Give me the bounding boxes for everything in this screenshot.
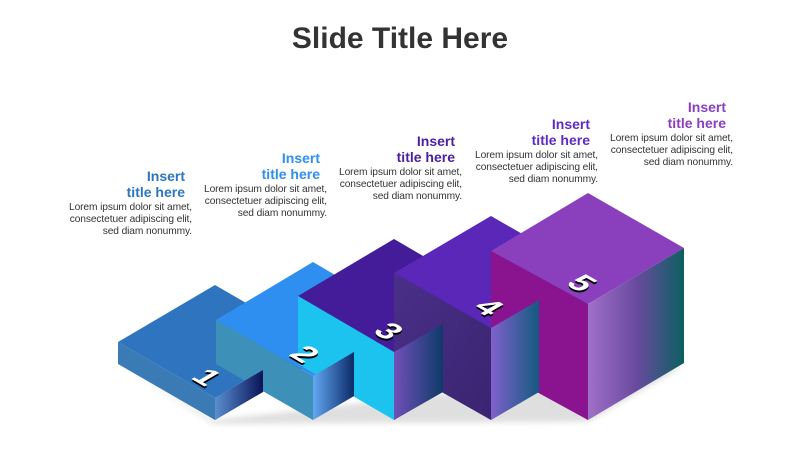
text block 2: [204, 150, 327, 219]
text: Lorem ipsum dolor sit amet,: [69, 202, 192, 213]
text: sed diam nonummy.: [103, 226, 192, 237]
text block 5: [610, 99, 733, 168]
text: Insert: [552, 116, 590, 132]
text: sed diam nonummy.: [644, 157, 733, 168]
text: Insert: [417, 133, 455, 149]
text: sed diam nonummy.: [509, 174, 598, 185]
box 3: [298, 239, 490, 420]
text: title here: [668, 115, 726, 131]
text block 1: [69, 168, 192, 237]
text: consectetuer adipiscing elit,: [476, 162, 598, 173]
text: title here: [127, 184, 185, 200]
step numbers: 5: [559, 271, 605, 298]
text: Lorem ipsum dolor sit amet,: [204, 184, 327, 195]
step numbers: 1: [184, 365, 230, 392]
step numbers: 4: [466, 295, 513, 323]
text: Lorem ipsum dolor sit amet,: [339, 167, 462, 178]
step numbers: 5: [559, 269, 605, 296]
step numbers: 3: [366, 317, 412, 344]
front right faces overlay: [215, 300, 539, 420]
text: sed diam nonummy.: [373, 191, 462, 202]
text: title here: [397, 149, 455, 165]
box 1: [118, 285, 312, 420]
box 5: [491, 193, 684, 420]
box 4: [394, 216, 587, 420]
text: consectetuer adipiscing elit,: [611, 145, 733, 156]
text: Lorem ipsum dolor sit amet,: [475, 150, 598, 161]
ground shadow: [130, 366, 684, 424]
text block 4: [475, 116, 598, 185]
text: Insert: [282, 150, 320, 166]
step numbers: 4: [466, 293, 513, 321]
text: title here: [262, 166, 320, 182]
text: consectetuer adipiscing elit,: [205, 196, 327, 207]
step numbers: 1: [184, 363, 230, 390]
text: sed diam nonummy.: [238, 208, 327, 219]
title: Slide Title Here: [292, 22, 508, 55]
step numbers: 3: [366, 319, 412, 346]
text: title here: [532, 132, 590, 148]
step numbers: 2: [282, 340, 328, 367]
text: consectetuer adipiscing elit,: [70, 214, 192, 225]
text: consectetuer adipiscing elit,: [340, 179, 462, 190]
text: Insert: [688, 99, 726, 115]
text: Insert: [147, 168, 185, 184]
step numbers: 2: [282, 342, 328, 369]
text block 3: [339, 133, 462, 202]
step numbers: [182, 269, 607, 392]
text: Lorem ipsum dolor sit amet,: [610, 133, 733, 144]
box 2: [216, 262, 410, 420]
